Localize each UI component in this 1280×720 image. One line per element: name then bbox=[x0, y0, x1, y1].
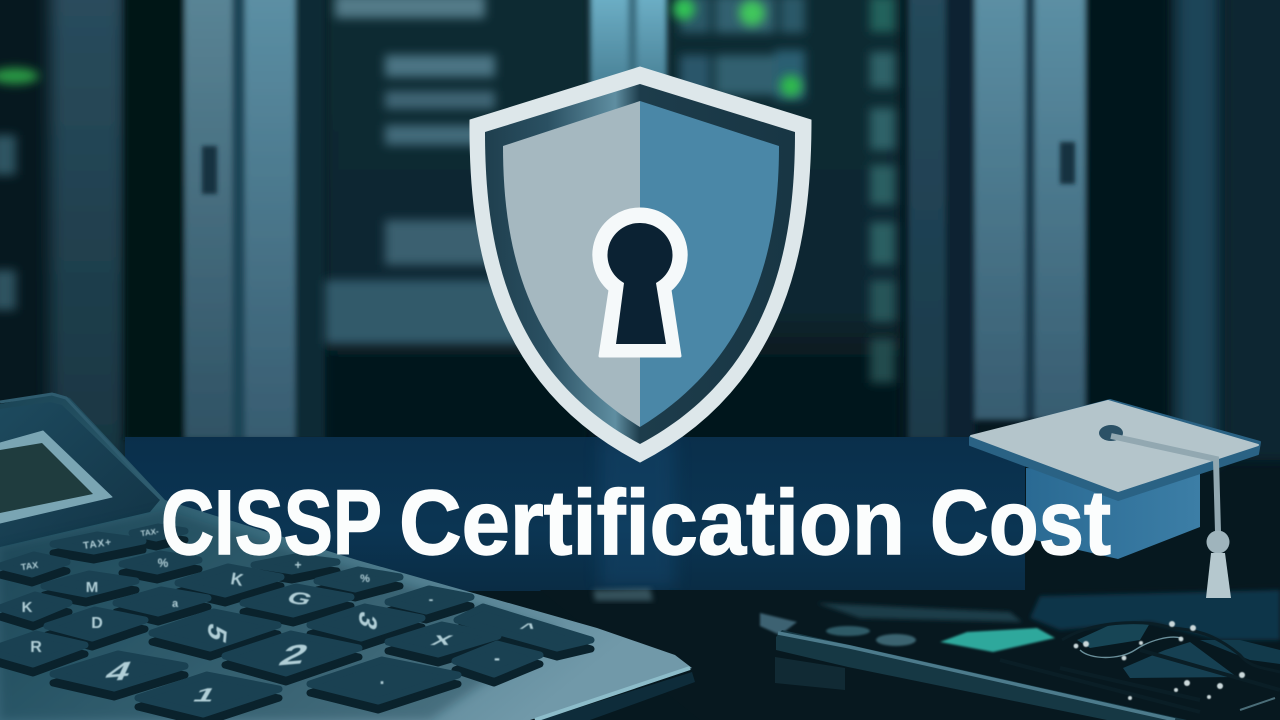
calculator key legends: 4 bbox=[100, 655, 137, 687]
calculator key legends: G bbox=[282, 588, 316, 610]
calculator bbox=[0, 393, 695, 720]
teal and grey device buttons bbox=[826, 626, 1055, 652]
calculator key legends: D bbox=[91, 615, 103, 632]
glasses resting on desk bbox=[1000, 621, 1280, 712]
calculator key legends: - bbox=[494, 648, 500, 668]
title banner bbox=[125, 437, 1025, 591]
desk and pen, lower right bbox=[540, 583, 1280, 720]
cap board top bbox=[971, 401, 1258, 491]
calculator key legends: TAX+ bbox=[82, 537, 113, 552]
calculator head panel bbox=[0, 402, 160, 547]
calculator key tops bbox=[0, 527, 591, 714]
calculator key legends: K bbox=[22, 599, 33, 616]
calculator key legends: K bbox=[229, 569, 245, 590]
blurred rack strips bbox=[0, 0, 895, 383]
cap board edge bbox=[970, 400, 1260, 500]
calculator key legends: M bbox=[86, 579, 98, 596]
calculator key legends: 5 bbox=[202, 619, 232, 647]
calculator key legends: + bbox=[294, 558, 302, 572]
calculator key legends: X bbox=[428, 632, 457, 648]
calculator key sides bbox=[0, 536, 591, 720]
calculator key legends: 2 bbox=[274, 639, 314, 672]
keyhole frame bbox=[594, 209, 686, 356]
calculator key legends bbox=[20, 527, 538, 706]
title word: CISSP: CISSP bbox=[161, 472, 382, 574]
pillar handles bbox=[202, 142, 1075, 194]
calculator key legends: R bbox=[30, 639, 42, 656]
key tray shadow bbox=[0, 510, 560, 720]
rack pillars bbox=[125, 0, 1167, 440]
soft dim pillars bbox=[50, 0, 1220, 470]
shield dark band bbox=[485, 84, 795, 444]
calculator body bbox=[0, 393, 692, 720]
shield outer frame bbox=[470, 67, 811, 462]
calculator key legends: ^ bbox=[515, 621, 538, 635]
calculator display bezel bbox=[0, 431, 112, 523]
calculator edge highlight bbox=[0, 394, 160, 498]
title word: Certification: Certification bbox=[399, 472, 905, 574]
calculator front rim bbox=[535, 668, 690, 720]
cap skull base bbox=[1026, 468, 1200, 559]
title word: Cost: Cost bbox=[930, 472, 1111, 574]
keyhole opening bbox=[607, 223, 673, 344]
tassel threads bbox=[1206, 553, 1231, 598]
shield right panel bbox=[640, 101, 779, 427]
calculator key legends: . bbox=[379, 668, 385, 688]
cap button bbox=[1099, 425, 1123, 441]
graduation cap bbox=[970, 400, 1260, 598]
calculator key legends: - bbox=[429, 591, 434, 607]
calculator key legends: TAX- bbox=[140, 527, 160, 538]
calculator key legends: a bbox=[172, 598, 179, 610]
title bbox=[161, 472, 1111, 574]
calculator side wall bbox=[540, 672, 695, 720]
calculator key legends: 1 bbox=[189, 685, 221, 706]
tassel cord bbox=[1111, 436, 1218, 532]
calculator key legends: % bbox=[158, 556, 169, 570]
rack interiors bbox=[325, 0, 1280, 460]
calculator key legends: % bbox=[360, 573, 370, 585]
green status LEDs bbox=[0, 0, 802, 97]
calculator key legends: 3 bbox=[353, 607, 382, 635]
calculator key legends: TAX bbox=[20, 560, 39, 572]
tassel knot bbox=[1206, 530, 1230, 554]
shield left panel bbox=[503, 101, 640, 427]
calculator display screen bbox=[0, 443, 93, 513]
shield icon bbox=[470, 67, 811, 462]
